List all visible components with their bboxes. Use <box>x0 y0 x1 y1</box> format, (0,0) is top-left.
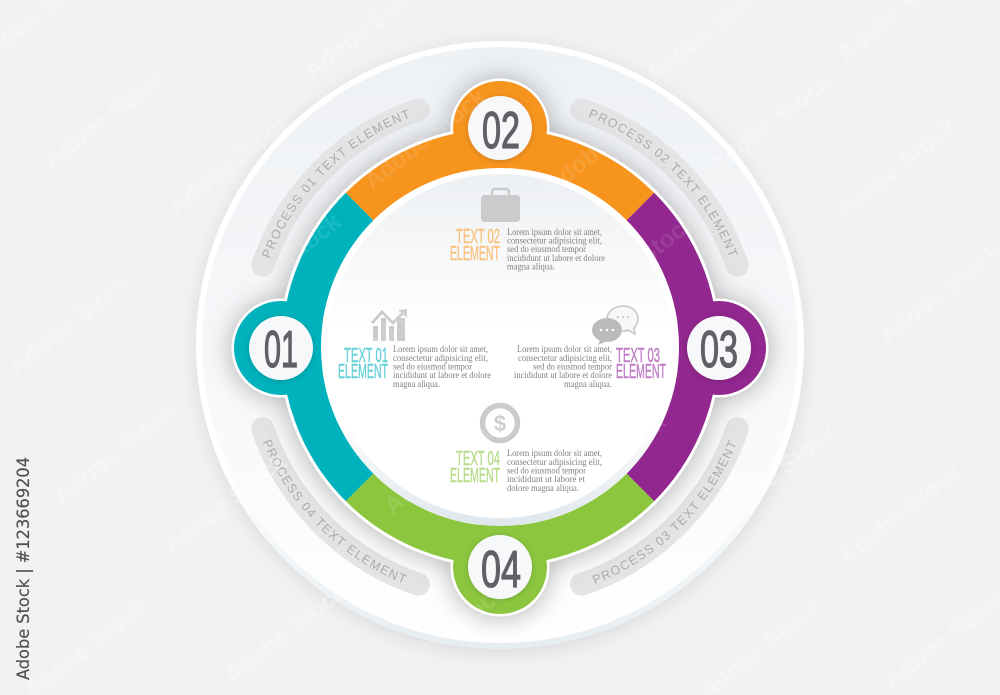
text block 01: ELEMENT <box>338 361 388 383</box>
text block 01: magna aliqua. <box>393 379 440 390</box>
text block 03: ELEMENT <box>616 361 666 383</box>
stock watermark: Adobe Stock <box>359 83 492 195</box>
curved label: process 03: PROCESS 03 TEXT ELEMENT <box>592 440 736 584</box>
text block 03: Lorem ipsum dolor sit amet, <box>517 344 612 355</box>
stock watermark: Adobe Stock <box>569 208 702 320</box>
text block 02: consectetur adipisicing elit, <box>507 236 602 246</box>
curved label: process 01: PROCESS 01 TEXT ELEMENT <box>262 110 408 258</box>
text block 02: incididunt ut labore et dolore <box>507 253 605 264</box>
curved label: process 04: PROCESS 04 TEXT ELEMENT <box>263 440 407 582</box>
text block 03 <box>514 344 666 390</box>
text block 01: TEXT 01 <box>344 345 388 367</box>
stock id label: Adobe Stock | #123669204 <box>14 457 34 680</box>
text block 04: dolore magna aliqua. <box>507 483 579 494</box>
text block 03: magna aliqua. <box>564 379 612 390</box>
stock watermark: Adobe Stock <box>539 88 672 200</box>
text block 02: magna aliqua. <box>507 262 555 272</box>
number badge 02: 02 <box>482 102 520 160</box>
text block 02: Lorem ipsum dolor sit amet, <box>507 227 602 238</box>
stock watermark: Adobe Stock <box>219 578 352 690</box>
number badge 04: 04 <box>481 541 521 599</box>
text block 03: incididunt ut labore et dolore <box>514 370 612 381</box>
inner disc <box>321 168 679 526</box>
text block 02: ELEMENT <box>450 243 500 265</box>
stock watermark: Adobe Stock <box>834 458 967 570</box>
number badge 02 <box>468 96 532 160</box>
icon: dollar coin <box>482 406 518 440</box>
segment 02: orange <box>360 81 640 207</box>
text block 03: sed do eiusmod tempor <box>533 362 613 372</box>
stock watermark: Adobe Stock <box>39 63 172 175</box>
text block 04: sed do eiusmod tempor <box>507 466 587 476</box>
curved label: process 02: PROCESS 02 TEXT ELEMENT <box>589 109 738 255</box>
ring backing with white outline and shadow <box>232 78 768 616</box>
stock watermark: Adobe Stock <box>214 208 347 320</box>
stock watermark: Adobe Stock <box>379 408 512 520</box>
stock watermark: Adobe Stock <box>704 68 837 180</box>
text block 01: Lorem ipsum dolor sit amet, <box>393 344 488 355</box>
number badge 04 <box>468 535 532 599</box>
segment 03: purple <box>640 207 766 487</box>
stock watermark: Adobe Stock <box>539 408 672 520</box>
text block 04: Lorem ipsum dolor sit amet, <box>507 448 602 459</box>
number badge 03 <box>687 316 751 380</box>
text block 04: ELEMENT <box>450 465 500 487</box>
curved label: process 04 <box>251 417 430 596</box>
text block 03: TEXT 03 <box>616 345 660 367</box>
text block 04 <box>450 448 602 494</box>
text block 01 <box>338 344 491 390</box>
icon: dollar coin: $ <box>494 411 506 436</box>
number badge 01 <box>249 316 313 380</box>
segment 01: teal <box>234 207 360 487</box>
text block 01: incididunt ut labore et dolore <box>393 370 491 381</box>
number badge 03: 03 <box>700 321 738 379</box>
stock watermark: Adobe Stock <box>49 398 182 510</box>
stock watermark: Adobe Stock <box>164 108 297 220</box>
icon: chat bubbles <box>592 306 638 345</box>
text block 04: consectetur adipisicing elit, <box>507 457 602 468</box>
text block 02 <box>450 226 605 272</box>
stock watermark: Adobe Stock <box>4 268 137 380</box>
stock watermark: Adobe Stock <box>829 113 962 225</box>
text block 01: sed do eiusmod tempor <box>393 362 473 372</box>
segment 04: green <box>360 487 640 614</box>
text block 04: TEXT 04 <box>456 448 500 470</box>
stock watermark: Adobe Stock <box>359 248 492 360</box>
icon: briefcase <box>481 189 520 222</box>
stock watermark: Adobe Stock <box>709 418 842 530</box>
text block 02: TEXT 02 <box>456 226 500 248</box>
outer disc <box>196 41 804 649</box>
icon: bar chart with arrow <box>372 309 407 341</box>
stock watermark: Adobe Stock <box>159 448 292 560</box>
number badge 01: 01 <box>264 321 298 379</box>
text block 02: sed do eiusmod tempor <box>507 244 587 255</box>
stock watermark: Adobe Stock <box>379 578 512 690</box>
text block 03: consectetur adipisicing elit, <box>518 353 612 364</box>
curved label: process 03 <box>570 417 749 596</box>
text block 04: incididunt ut labore et <box>507 474 585 485</box>
text block 01: consectetur adipisicing elit, <box>393 353 488 364</box>
